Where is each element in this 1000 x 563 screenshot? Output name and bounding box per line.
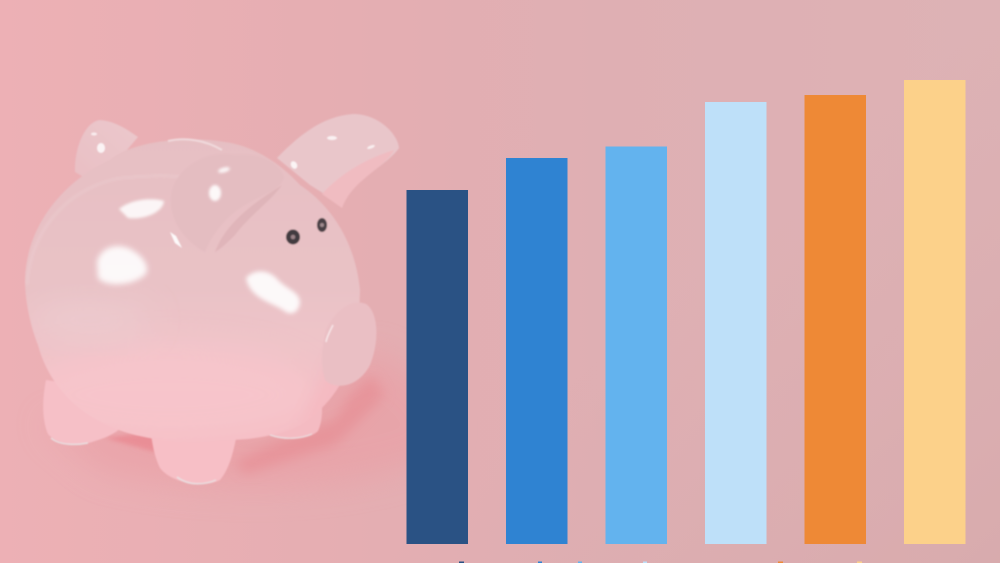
glossy highlights	[91, 132, 375, 313]
bar 4 pale blue	[705, 102, 766, 544]
bar 1 dark navy	[406, 190, 468, 544]
back-right foot	[262, 398, 322, 439]
coin slot	[168, 139, 222, 150]
floor shadow under piggy bank	[40, 350, 445, 488]
snout	[322, 302, 376, 386]
clipped legend marks at bottom edge	[459, 562, 862, 563]
foot rims	[51, 438, 88, 444]
eye right	[317, 218, 327, 232]
bar chart	[406, 80, 966, 544]
body	[25, 139, 360, 442]
bar 2 medium blue	[506, 158, 568, 544]
front foot	[150, 425, 238, 484]
right ear	[277, 114, 399, 205]
body shading	[20, 300, 370, 445]
bar 6 light amber	[904, 80, 966, 544]
near ear	[171, 154, 284, 252]
back-left foot	[43, 380, 122, 444]
left ear	[75, 120, 138, 178]
piggy bank	[20, 114, 399, 484]
eye left	[286, 230, 300, 244]
rim highlight on back	[27, 176, 225, 285]
bar 5 orange	[804, 95, 866, 544]
bar 3 sky blue	[606, 146, 667, 544]
